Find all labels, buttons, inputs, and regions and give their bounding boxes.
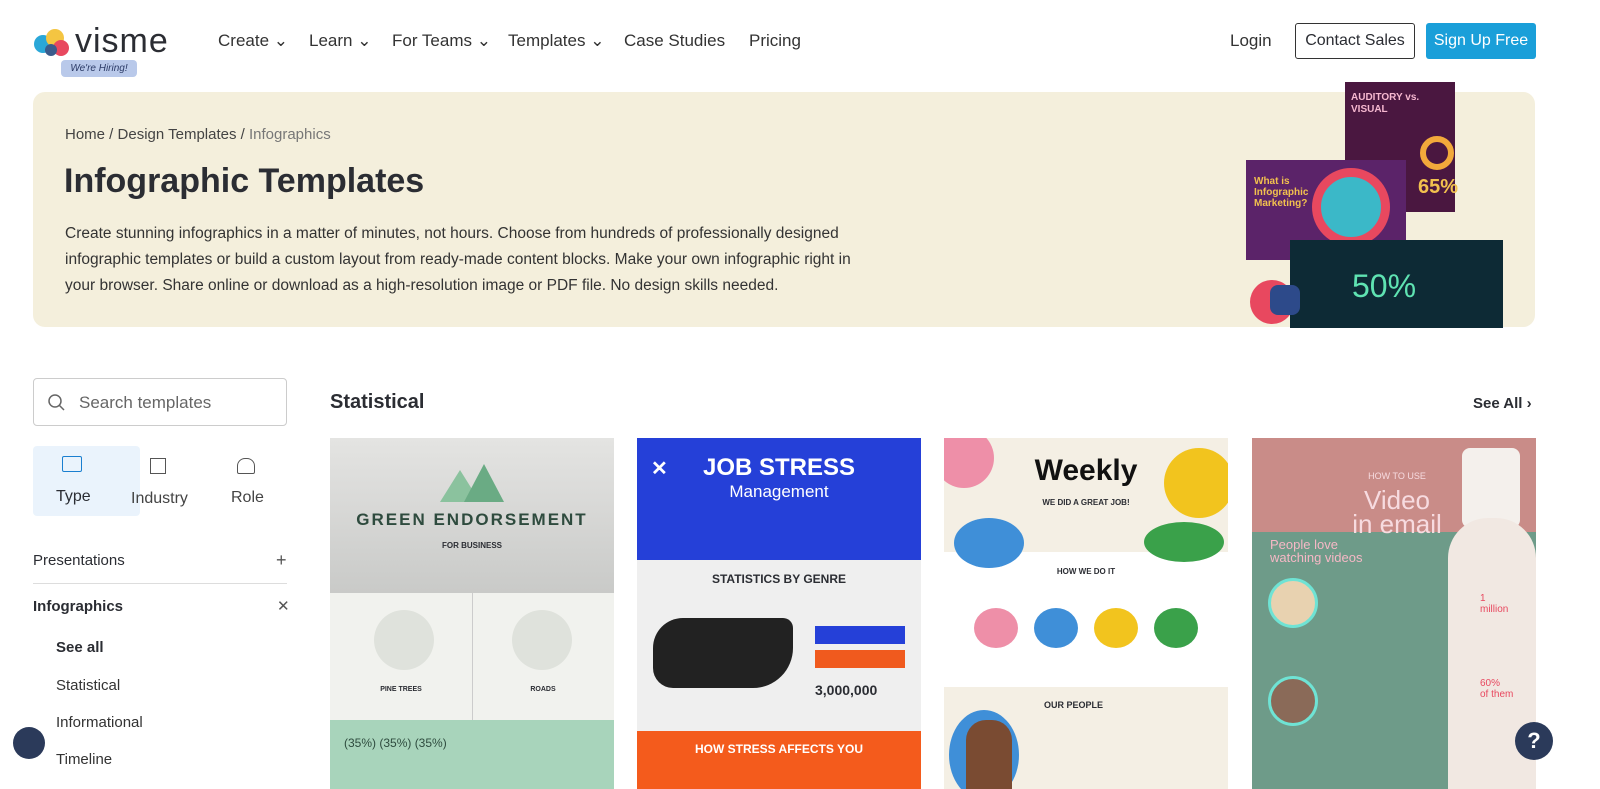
card: job stress: Management (729, 482, 829, 501)
card: job stress: HOW STRESS AFFECTS YOU (695, 742, 863, 756)
breadcrumb: Home / Design Templates / Infographics (65, 126, 331, 143)
navigation menu: Learn ⌄ (309, 31, 371, 50)
card: job stress: STATISTICS BY GENRE (712, 572, 846, 586)
navigation menu: For Teams ⌄ (392, 31, 491, 50)
card: video in email: 1 (1480, 593, 1486, 604)
sidebar categories: Timeline (56, 751, 112, 768)
banner (33, 92, 1535, 327)
help button (1515, 722, 1553, 760)
hero illustration (1246, 82, 1503, 328)
hero illustration: 50% (1352, 268, 1416, 304)
card: green endorsement: ROADS (530, 686, 556, 693)
card: job stress: JOB STRESS (703, 454, 855, 481)
section heading: Statistical (330, 391, 424, 413)
sidebar categories (33, 550, 290, 768)
card: weekly: OUR PEOPLE (1044, 700, 1103, 710)
card: video in email (1252, 438, 1536, 789)
logo: visme (75, 22, 169, 60)
logo: We're Hiring! (70, 63, 128, 74)
sidebar categories: + (276, 550, 287, 570)
card: green endorsement: PINE TREES (380, 686, 422, 693)
sidebar categories: Infographics (33, 598, 123, 615)
hero illustration: What is Infographic Marketing? (1254, 176, 1308, 209)
search box (33, 378, 287, 426)
sidebar categories: Informational (56, 714, 143, 731)
header actions (1230, 23, 1536, 59)
sidebar categories: Statistical (56, 677, 120, 694)
navigation menu: Case Studies (624, 31, 725, 50)
header actions: Contact Sales (1305, 32, 1405, 49)
filter tabs (33, 446, 264, 516)
card: video in email: People love (1270, 537, 1338, 552)
card: job stress (637, 438, 921, 789)
search box: Search templates (79, 393, 211, 412)
card: job stress: ✕ (651, 458, 668, 480)
card: video in email: watching videos (1270, 550, 1362, 565)
card: green endorsement: FOR BUSINESS (442, 541, 502, 550)
see all link: See All › (1473, 395, 1532, 412)
card: video in email: in email (1352, 509, 1442, 539)
card: green endorsement: (35%) (35%) (35%) (344, 736, 447, 750)
sidebar categories: ✕ (277, 598, 290, 615)
navigation menu: Create ⌄ (218, 31, 288, 50)
card: weekly: WE DID A GREAT JOB! (1042, 498, 1130, 507)
card: green endorsement: GREEN ENDORSEMENT (356, 510, 588, 529)
card: weekly: Weekly (1035, 454, 1137, 487)
card: video in email: HOW TO USE (1368, 471, 1426, 481)
card: weekly (944, 438, 1228, 789)
header actions: Sign Up Free (1434, 32, 1528, 49)
card: weekly: HOW WE DO IT (1057, 567, 1115, 576)
header actions: Login (1230, 31, 1272, 50)
card: video in email: of them (1480, 689, 1513, 700)
card: video in email: million (1480, 604, 1508, 615)
filter tabs: Role (231, 489, 264, 506)
navigation menu (218, 31, 801, 50)
sidebar categories: See all (56, 639, 104, 656)
logo (34, 22, 169, 77)
sidebar categories: Presentations (33, 552, 125, 569)
hero illustration: 65% (1418, 176, 1458, 198)
help button: ? (1527, 728, 1541, 753)
card: job stress: 3,000,000 (815, 682, 877, 698)
filter tabs: Type (56, 488, 91, 505)
navigation menu: Templates ⌄ (508, 31, 604, 50)
card: video in email: Video (1364, 485, 1430, 515)
navigation menu: Pricing (749, 31, 801, 50)
cookie icon (13, 727, 45, 759)
description: Create stunning infographics in a matter of minutes, not hours. Choose from hundreds of professionally designed infographic templates or build a custom layout from ready-made content blocks. Make your own infographic right in your browser. Share online or download as a high-resolution image or PDF file. No design skills needed. (65, 225, 851, 294)
filter tabs: Industry (131, 490, 188, 507)
hero illustration: AUDITORY vs. VISUAL (1351, 92, 1419, 115)
title: Infographic Templates (64, 162, 424, 200)
card: video in email: 60% (1480, 678, 1500, 689)
card: green endorsement (330, 438, 614, 789)
